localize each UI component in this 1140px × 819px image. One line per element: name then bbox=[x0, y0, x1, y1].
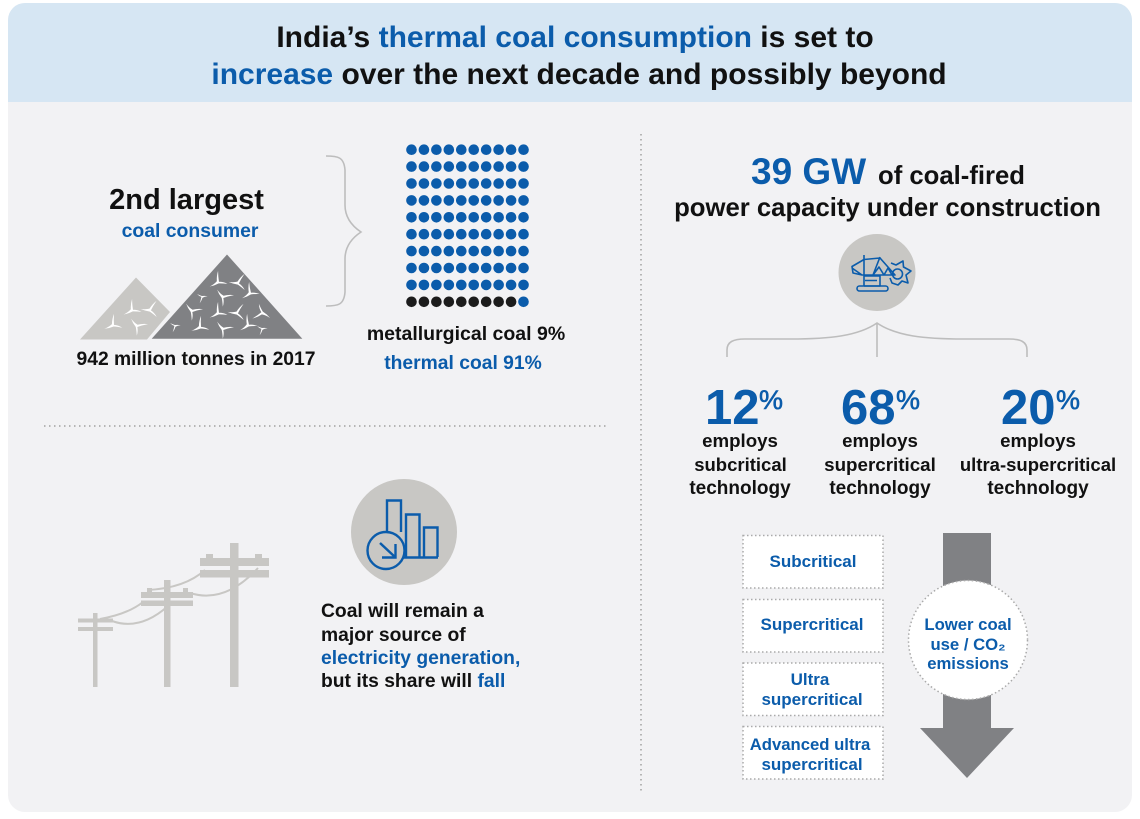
stat: 68% supercritical: % bbox=[896, 385, 920, 415]
heading: 39 GW under construction: power capacity under construction bbox=[674, 194, 1101, 222]
title bbox=[211, 21, 947, 91]
text: electricity outlook: Coal will remain a bbox=[321, 601, 484, 622]
heading: 2nd largest coal consumer: coal consumer bbox=[122, 220, 259, 242]
heading: 2nd largest coal consumer: 2nd largest bbox=[109, 184, 264, 216]
stat: 20% ultra-supercritical: ultra-supercritical bbox=[960, 454, 1116, 475]
box: ultra supercritical: Ultra bbox=[791, 670, 830, 689]
stat: 68% supercritical: technology bbox=[829, 478, 931, 499]
stat: 20% ultra-supercritical: % bbox=[1056, 385, 1080, 415]
icon: power poles bbox=[78, 543, 269, 687]
arrow: downward bbox=[920, 533, 1014, 778]
text: electricity outlook bbox=[321, 601, 520, 692]
icon: bucket wheel excavator bbox=[838, 234, 916, 311]
callout: lower coal use: Lower coal bbox=[924, 615, 1012, 634]
dot grid: coal share bbox=[412, 150, 530, 302]
stat: 68% supercritical: 68 bbox=[841, 381, 896, 435]
title: increase over the next decade and possibly beyond bbox=[211, 58, 947, 91]
box: ultra supercritical bbox=[743, 663, 883, 716]
header band bbox=[8, 3, 1132, 102]
box: advanced ultra supercritical: supercritical bbox=[761, 755, 863, 774]
heading: 2nd largest coal consumer bbox=[109, 184, 264, 242]
box: supercritical: Supercritical bbox=[760, 615, 864, 634]
stat: 68% supercritical bbox=[824, 381, 936, 499]
box: subcritical bbox=[743, 536, 883, 588]
box: advanced ultra supercritical bbox=[743, 726, 883, 779]
callout: lower coal use: emissions bbox=[927, 654, 1009, 673]
brace bbox=[326, 156, 361, 306]
coal share labels bbox=[367, 323, 565, 374]
stat: 20% ultra-supercritical: 20 bbox=[1001, 381, 1056, 435]
title: India’s thermal coal consumption is set to bbox=[276, 21, 874, 54]
icon: falling bar chart bbox=[351, 479, 457, 585]
callout: lower coal use bbox=[908, 580, 1028, 700]
stat: 68% supercritical: employs bbox=[842, 430, 918, 451]
stat: 12% subcritical: employs bbox=[702, 430, 778, 451]
stat: 12% subcritical: subcritical bbox=[694, 454, 787, 475]
box: advanced ultra supercritical: Advanced ultra bbox=[750, 735, 871, 754]
stat: 12% subcritical: technology bbox=[689, 478, 791, 499]
coal share labels: thermal coal 91% bbox=[384, 353, 542, 374]
text: electricity outlook: major source of bbox=[321, 625, 466, 646]
pile caption: 942 million tonnes in 2017 bbox=[77, 349, 315, 370]
stat: 20% ultra-supercritical bbox=[960, 381, 1116, 499]
box: ultra supercritical: supercritical bbox=[761, 690, 863, 709]
heading: 39 GW under construction: 39 GW bbox=[751, 151, 866, 192]
box: supercritical bbox=[743, 600, 883, 652]
box: subcritical: Subcritical bbox=[770, 552, 856, 571]
coal share labels: metallurgical coal 9% bbox=[367, 323, 565, 345]
bracket: technology split bbox=[727, 323, 1027, 357]
stat: 12% subcritical bbox=[689, 381, 791, 499]
callout: lower coal use: use / CO₂ bbox=[930, 635, 1006, 654]
stat: 20% ultra-supercritical: technology bbox=[987, 478, 1089, 499]
text: electricity outlook: electricity generation, bbox=[321, 648, 520, 669]
stat: 20% ultra-supercritical: employs bbox=[1000, 430, 1076, 451]
stat: 12% subcritical: 12 bbox=[705, 381, 760, 435]
heading: 39 GW under construction bbox=[674, 151, 1101, 222]
icon: coal piles bbox=[80, 254, 303, 340]
text: electricity outlook: but its share will fall bbox=[321, 671, 505, 692]
stat: 12% subcritical: % bbox=[759, 385, 783, 415]
stat: 68% supercritical: supercritical bbox=[824, 454, 936, 475]
heading: 39 GW under construction: of coal-fired bbox=[878, 162, 1025, 190]
